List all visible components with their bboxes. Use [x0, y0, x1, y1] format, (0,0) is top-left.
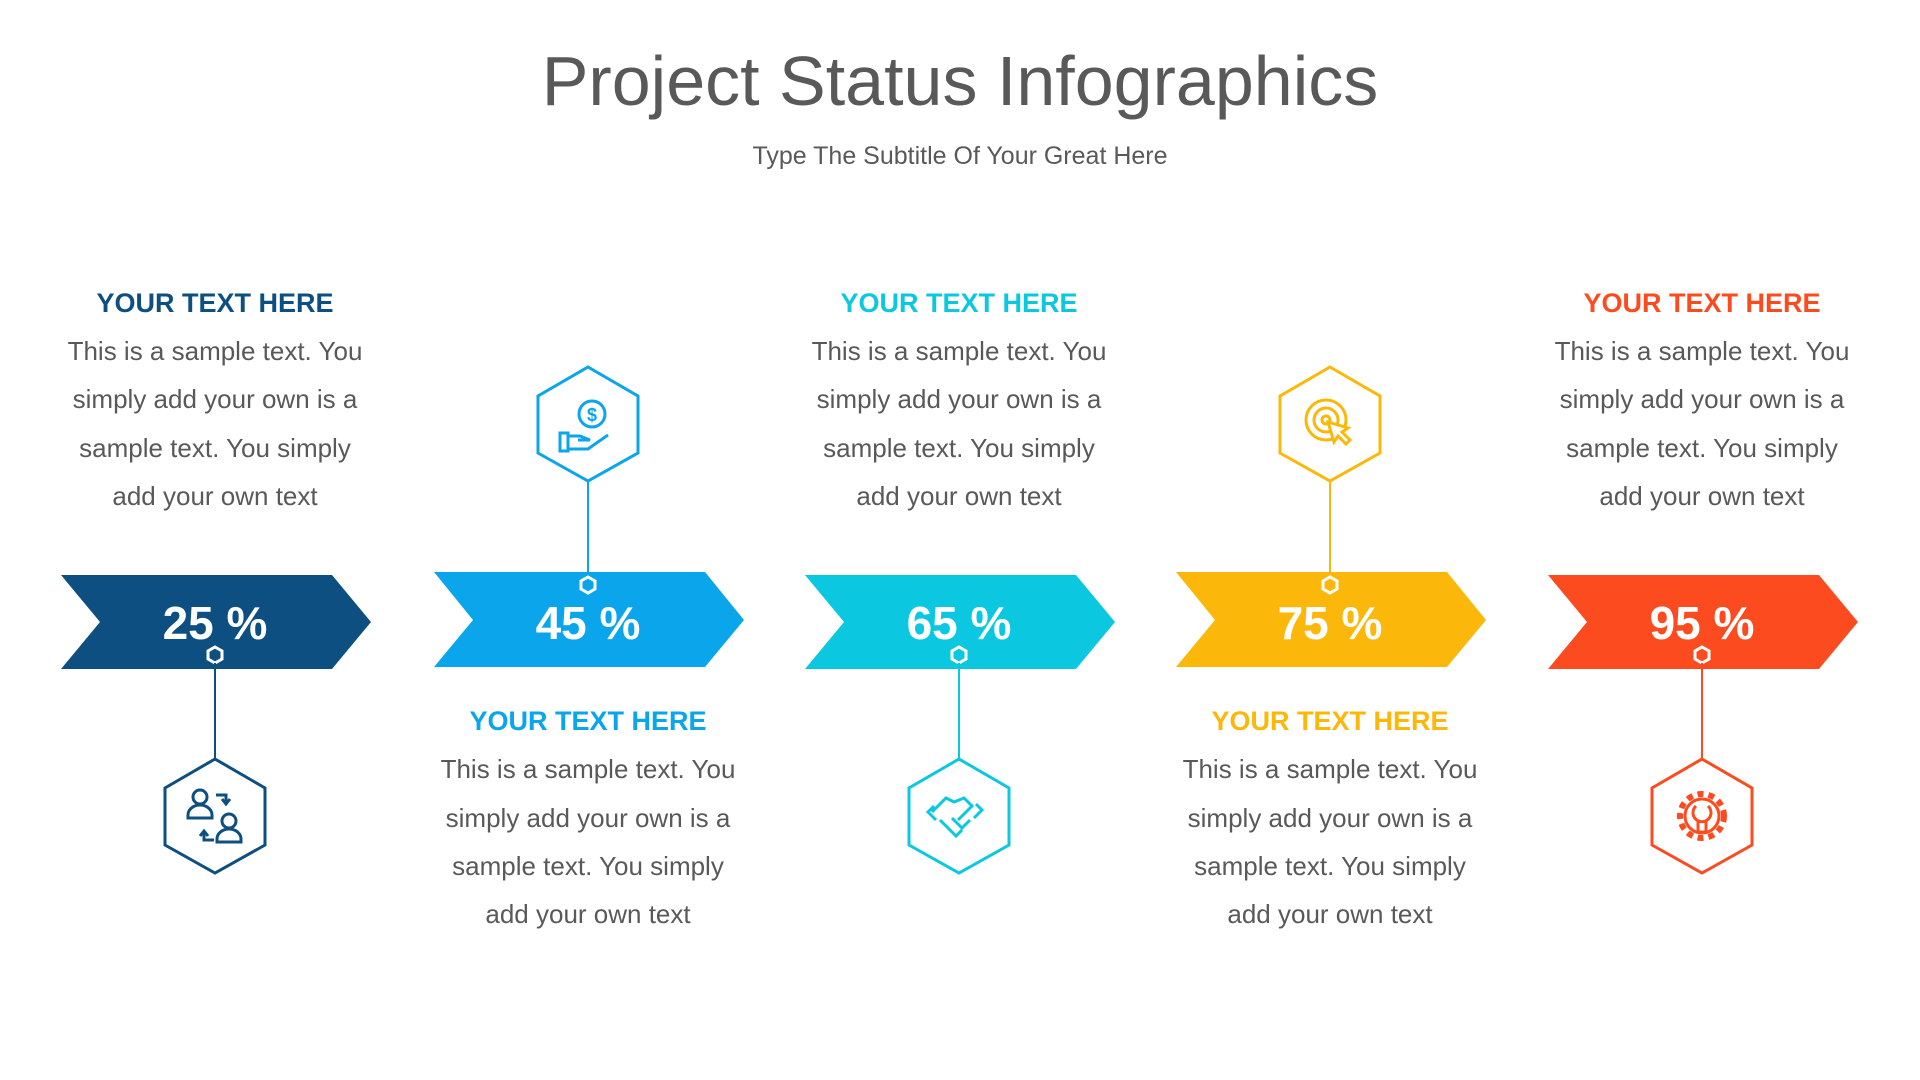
text block 5: sample text. You simply	[1566, 433, 1838, 463]
icon: handshake	[909, 759, 1009, 873]
marker 2	[581, 577, 595, 593]
value 2: 45 %	[536, 597, 640, 649]
icon: people exchange	[165, 759, 265, 873]
text block 2: This is a sample text. You	[441, 754, 735, 784]
subtitle: Type The Subtitle Of Your Great Here	[752, 142, 1168, 170]
arrow 3	[805, 575, 1115, 669]
heading 4: YOUR TEXT HERE	[1211, 706, 1449, 736]
text block 3: sample text. You simply	[823, 433, 1095, 463]
connector 1	[208, 647, 222, 759]
icon: money hand	[538, 367, 638, 481]
panel: step 5	[1548, 288, 1858, 873]
text block 5: simply add your own is a	[1560, 384, 1845, 414]
text block 4: simply add your own is a	[1188, 803, 1473, 833]
value 4: 75 %	[1278, 597, 1382, 649]
heading 3: YOUR TEXT HERE	[840, 288, 1078, 318]
text block 3: add your own text	[856, 481, 1062, 511]
text block 1: simply add your own is a	[73, 384, 358, 414]
text block 2: simply add your own is a	[446, 803, 731, 833]
text block 4: sample text. You simply	[1194, 851, 1466, 881]
heading 2: YOUR TEXT HERE	[469, 706, 707, 736]
text block 1: This is a sample text. You	[68, 336, 362, 366]
arrow 5	[1548, 575, 1858, 669]
arrow 2	[434, 572, 744, 667]
icon: money hand: $	[587, 405, 597, 425]
text block 1: sample text. You simply	[79, 433, 351, 463]
text block 2: sample text. You simply	[452, 851, 724, 881]
heading 1: YOUR TEXT HERE	[96, 288, 334, 318]
panel: step 3	[805, 288, 1115, 873]
panel: step 2	[434, 367, 744, 929]
icon: target cursor	[1280, 367, 1380, 481]
marker 4	[1323, 577, 1337, 593]
connector 5	[1695, 647, 1709, 759]
text block 4: This is a sample text. You	[1183, 754, 1477, 784]
connector 3	[952, 647, 966, 759]
arrow 1	[61, 575, 371, 669]
value 3: 65 %	[907, 597, 1011, 649]
text block 4: add your own text	[1227, 899, 1433, 929]
text block 3: simply add your own is a	[817, 384, 1102, 414]
text block 1: add your own text	[112, 481, 318, 511]
text block 5: This is a sample text. You	[1555, 336, 1849, 366]
connector 4	[1329, 481, 1331, 577]
value 5: 95 %	[1650, 597, 1754, 649]
connector 2	[587, 481, 589, 577]
icon: gear wrench	[1652, 759, 1752, 873]
panel: step 4	[1176, 367, 1486, 929]
text block 5: add your own text	[1599, 481, 1805, 511]
value 1: 25 %	[163, 597, 267, 649]
text block 3: This is a sample text. You	[812, 336, 1106, 366]
text block 2: add your own text	[485, 899, 691, 929]
arrow 4	[1176, 572, 1486, 667]
title: Project Status Infographics	[542, 42, 1378, 120]
panel: step 1	[61, 288, 371, 873]
heading 5: YOUR TEXT HERE	[1583, 288, 1821, 318]
